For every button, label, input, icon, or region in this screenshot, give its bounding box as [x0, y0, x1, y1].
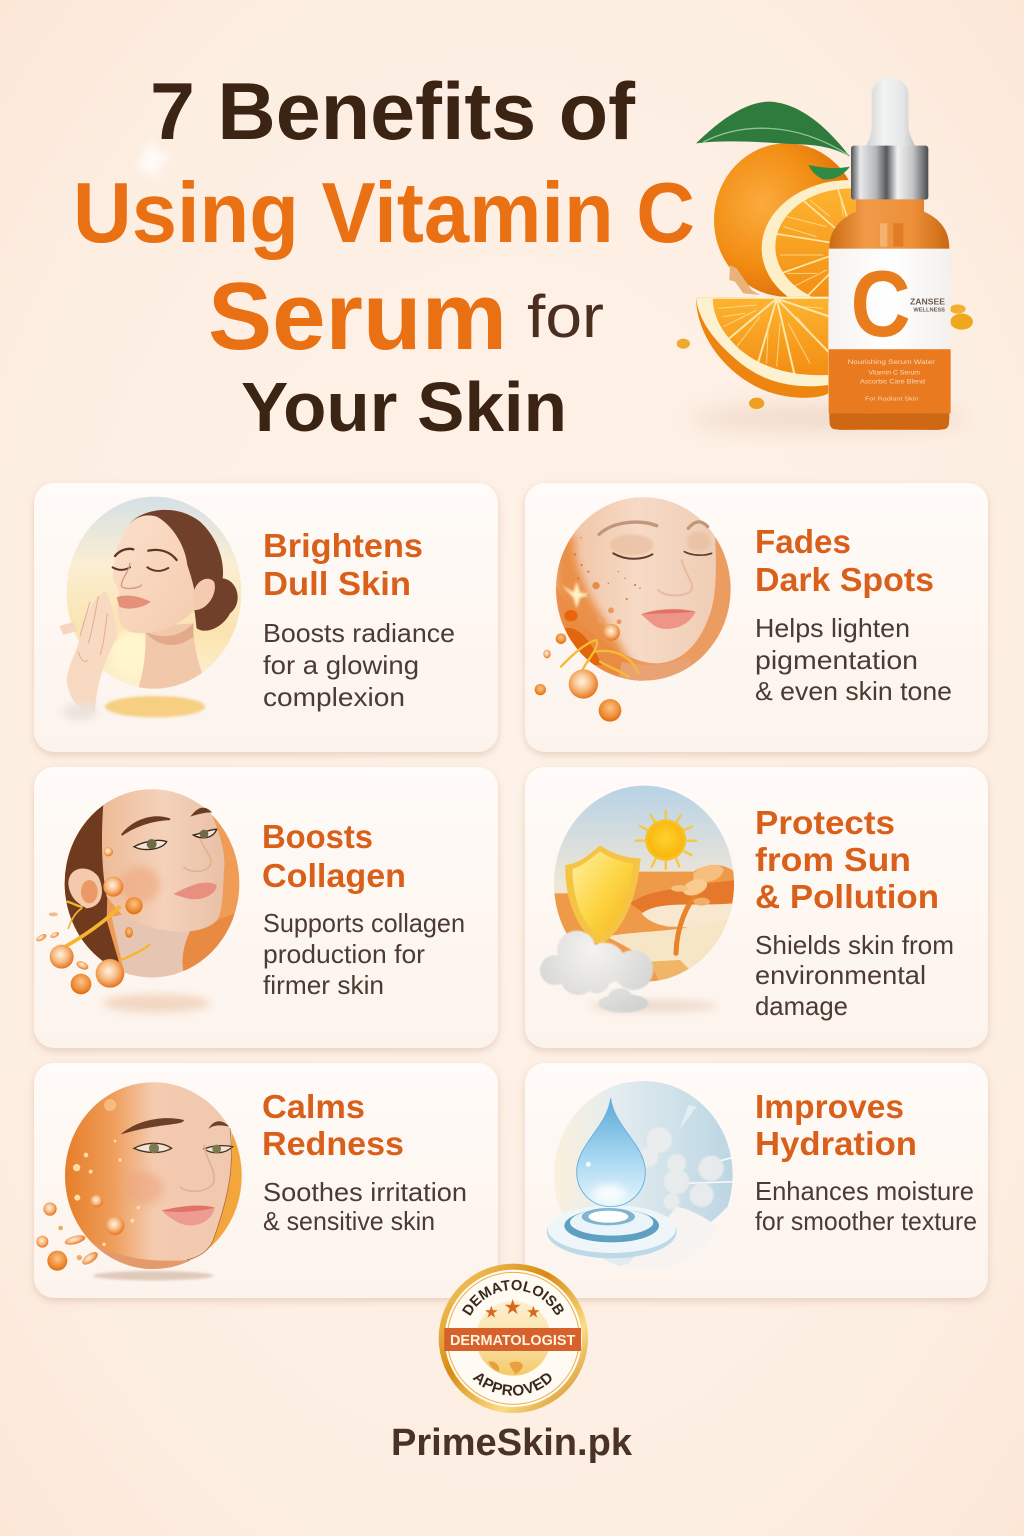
badge: curved top text: DEMATOLOISB	[462, 1280, 564, 1316]
nose	[183, 838, 211, 871]
glow specks	[73, 1099, 140, 1246]
description: firmer skin	[263, 970, 384, 1000]
illustration: calm face with orange glow	[36, 1078, 243, 1280]
product illustration: oranges and serum bottle	[677, 77, 973, 431]
description: pigmentation	[755, 645, 918, 675]
description: Boosts radiance	[263, 618, 455, 648]
icon: small vitamin capsules	[677, 304, 973, 409]
bottle label: lower text: For Radiant Skin	[865, 396, 918, 402]
hand	[67, 591, 117, 712]
brows and eyes	[122, 817, 170, 835]
panel: Boosts Collagen	[34, 767, 498, 1048]
description: & even skin tone	[755, 676, 952, 706]
illustration: woman touching her face	[59, 497, 241, 720]
description	[263, 1177, 467, 1236]
heading: Brightens	[263, 527, 423, 564]
description: environmental	[755, 960, 926, 990]
heading: Dull Skin	[263, 565, 411, 602]
eyebrows and eyes	[113, 549, 177, 588]
description: Supports collagen	[263, 908, 465, 938]
heading: Hydration	[755, 1125, 917, 1162]
icon: whole orange	[714, 143, 859, 297]
description: Enhances moisture	[755, 1176, 974, 1206]
heading: Fades	[755, 523, 851, 560]
badge: dermatologist approved seal	[438, 1264, 588, 1413]
tree	[671, 876, 710, 953]
collagen bubbles	[35, 847, 143, 994]
panel: Calms Redness	[34, 1063, 498, 1298]
description	[263, 908, 465, 1000]
illustration: shield, sun and landscape	[540, 786, 737, 1013]
heading	[755, 523, 934, 598]
heading: Dark Spots	[755, 561, 934, 598]
bottle label: lower text: Ascorbic Care Blend	[860, 379, 925, 386]
panel: Improves Hydration	[525, 1063, 988, 1298]
description	[755, 1176, 977, 1236]
heading	[755, 1088, 917, 1162]
heading: Improves	[755, 1088, 904, 1125]
heading: & Pollution	[755, 878, 939, 915]
golden swirl	[561, 640, 638, 677]
heading	[755, 804, 939, 915]
badge: stars	[485, 1299, 540, 1318]
nose and jaw	[180, 1128, 231, 1260]
heading: Collagen	[262, 857, 406, 894]
panel: Brightens Dull Skin	[34, 483, 498, 752]
description: damage	[755, 991, 848, 1021]
bottle label: lower text: Nourishing Serum Water	[848, 359, 936, 366]
description	[263, 618, 455, 712]
heading: Boosts	[262, 818, 373, 855]
brows, closed eyes, nose	[599, 522, 712, 595]
cream swatch	[59, 622, 77, 635]
description: Helps lighten	[755, 613, 910, 643]
badge: curved bottom text: APPROVED	[472, 1373, 552, 1396]
golden glow pool	[105, 696, 205, 717]
heading: Redness	[262, 1125, 404, 1162]
lips	[641, 609, 696, 629]
title: 7 Benefits of	[150, 67, 636, 157]
sparkle	[562, 582, 590, 608]
description: Shields skin from	[755, 930, 954, 960]
illustration: face with dark spots	[535, 492, 731, 722]
hair and bun	[130, 510, 238, 631]
description	[755, 613, 952, 706]
ear	[68, 868, 102, 908]
description: & sensitive skin	[263, 1206, 435, 1236]
icon: green leaf	[696, 102, 850, 180]
title: for	[527, 283, 604, 350]
decorative star glint	[136, 138, 172, 180]
icon: serum bottle	[829, 77, 951, 430]
heading: from Sun	[755, 841, 911, 878]
golden streaks	[65, 902, 149, 960]
lips	[162, 1206, 215, 1226]
description	[755, 930, 954, 1021]
panel: Protects from Sun & Pollution	[525, 767, 988, 1048]
title: Your Skin	[241, 368, 567, 446]
title: Serum	[208, 263, 507, 370]
water drop	[577, 1098, 645, 1207]
bottle label: small brand text: WELLNESS	[913, 307, 945, 313]
droplets	[535, 624, 621, 722]
illustration: face with collagen bubbles	[35, 783, 243, 1013]
cloud	[540, 931, 653, 1013]
face	[113, 515, 195, 633]
shield	[565, 845, 641, 946]
heading: Calms	[262, 1088, 365, 1125]
title: Using Vitamin C	[73, 166, 695, 261]
bottle label: small brand text	[910, 296, 945, 313]
cotton balls and swabs	[638, 1105, 733, 1210]
description: for a glowing	[263, 650, 419, 680]
icon: orange stem nub	[729, 265, 760, 295]
ear	[193, 579, 215, 610]
bottle label: big C: C	[851, 252, 911, 356]
panel: Fades Dark Spots	[525, 483, 988, 752]
icon: upright orange slice	[762, 180, 938, 317]
bottle label: lower text	[848, 359, 936, 402]
freckles	[574, 537, 641, 624]
heading	[262, 818, 406, 894]
badge: ribbon	[444, 1328, 581, 1351]
icon: halved orange	[696, 297, 830, 398]
sun	[636, 811, 696, 869]
description: production for	[263, 939, 425, 969]
description: complexion	[263, 682, 405, 712]
description: for smoother texture	[755, 1206, 977, 1236]
lips	[173, 883, 217, 899]
title	[73, 67, 695, 446]
heading: Protects	[755, 804, 895, 841]
badge: ribbon: DERMATOLOGIST	[450, 1333, 576, 1349]
brows and eyes	[121, 1118, 184, 1134]
floating droplets	[36, 1195, 124, 1271]
description: Soothes irritation	[263, 1177, 467, 1207]
brand name: PrimeSkin.pk	[391, 1422, 633, 1464]
ripple disc	[547, 1205, 677, 1258]
heading	[263, 527, 423, 602]
bottle label: lower text: Vitamin C Serum	[868, 369, 920, 376]
heading	[262, 1088, 404, 1162]
illustration: water drop and cotton	[547, 1081, 733, 1273]
bottle label: small brand text: ZANSEE	[910, 296, 945, 306]
lips	[117, 596, 151, 609]
